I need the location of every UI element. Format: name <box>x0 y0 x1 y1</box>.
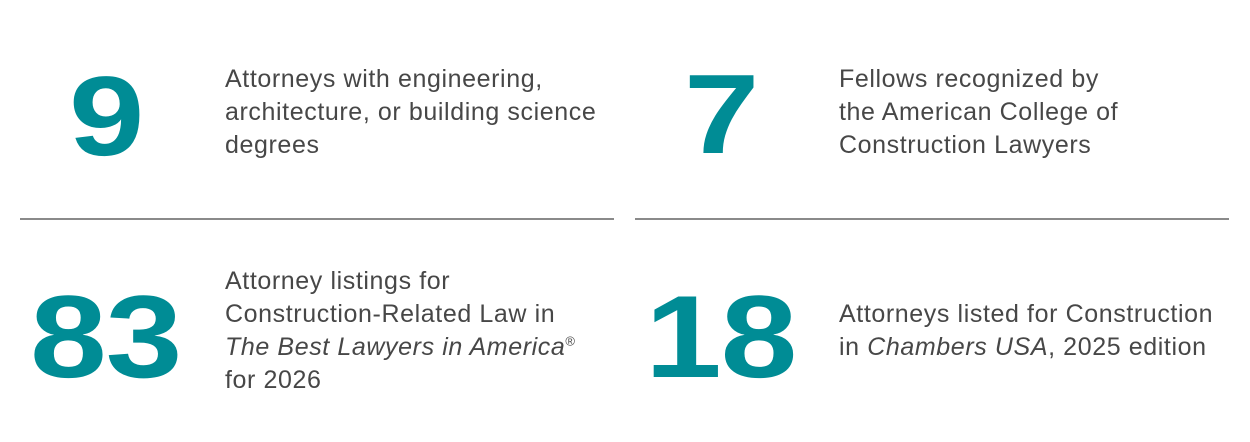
stat: 18: 18 <box>645 271 796 402</box>
text: best lawyers: Attorney listings for <box>225 267 450 295</box>
text: engineering degrees: degrees <box>225 131 320 159</box>
text: engineering degrees <box>225 65 596 159</box>
text: best lawyers: for 2026 <box>225 366 322 394</box>
text: engineering degrees: Attorneys with engineering, <box>225 65 543 93</box>
text: chambers: Attorneys listed for Construction <box>839 300 1213 328</box>
text: best lawyers: Construction-Related Law in <box>225 300 555 328</box>
text: best lawyers <box>225 267 576 394</box>
text: fellows: Construction Lawyers <box>839 131 1091 159</box>
text: fellows <box>839 65 1118 159</box>
text: best lawyers: The Best Lawyers in America® <box>225 333 576 361</box>
stat: 7: 7 <box>684 51 758 177</box>
text: chambers <box>839 300 1213 361</box>
text: chambers: in Chambers USA, 2025 edition <box>839 333 1207 361</box>
text: fellows: the American College of <box>839 98 1118 126</box>
text: engineering degrees: architecture, or building science <box>225 98 596 126</box>
stat: 9: 9 <box>69 53 143 179</box>
text: fellows: Fellows recognized by <box>839 65 1099 93</box>
stat: 83: 83 <box>30 271 181 402</box>
